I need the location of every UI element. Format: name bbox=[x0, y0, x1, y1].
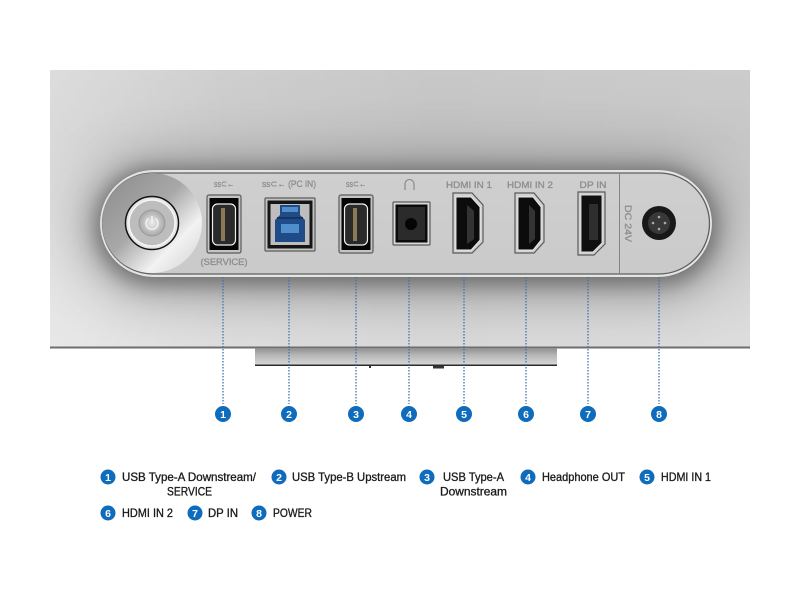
port: DisplayPort bbox=[578, 192, 605, 255]
legend: USB Type-B Upstream bbox=[292, 470, 406, 484]
legend bbox=[100, 470, 711, 520]
port: USB-B bbox=[265, 198, 315, 251]
legend: HDMI IN 2 bbox=[122, 506, 173, 520]
port: HDMI 2 bbox=[515, 193, 544, 253]
numbered markers: 4 bbox=[406, 409, 412, 421]
port labels: ss⊂← bbox=[214, 179, 234, 190]
legend: 2 bbox=[276, 472, 282, 484]
numbered markers: 5 bbox=[461, 409, 467, 421]
port: USB-A bbox=[339, 195, 373, 253]
diagram bbox=[50, 170, 750, 520]
port: DC power bbox=[642, 206, 676, 240]
legend: POWER bbox=[273, 506, 312, 520]
legend: USB Type-A bbox=[443, 470, 504, 484]
divider bbox=[619, 174, 620, 273]
numbered markers: 6 bbox=[523, 409, 529, 421]
port labels: (SERVICE) bbox=[200, 257, 248, 268]
callout leaders bbox=[223, 277, 659, 404]
legend: HDMI IN 1 bbox=[661, 470, 711, 484]
numbered markers: 8 bbox=[656, 409, 662, 421]
legend: 5 bbox=[644, 472, 650, 484]
power button bbox=[102, 173, 202, 273]
port labels: ss⊂← bbox=[346, 179, 366, 190]
legend: DP IN bbox=[208, 506, 238, 520]
legend: USB Type-A Downstream/ bbox=[122, 470, 257, 484]
port: headphone jack bbox=[393, 202, 430, 245]
legend: 7 bbox=[192, 508, 198, 520]
port labels: DP IN bbox=[580, 180, 607, 191]
port: HDMI 1 bbox=[453, 193, 483, 253]
numbered markers: 2 bbox=[286, 409, 292, 421]
legend: 1 bbox=[105, 472, 111, 484]
numbered markers bbox=[215, 406, 667, 422]
legend: 4 bbox=[525, 472, 531, 484]
port labels: DC 24V bbox=[622, 205, 633, 243]
panel bottom edge bbox=[50, 346, 750, 348]
legend: 6 bbox=[105, 508, 111, 520]
panel: monitor back bbox=[50, 70, 750, 348]
legend: Downstream bbox=[440, 484, 507, 498]
port: USB-A service bbox=[207, 195, 241, 253]
port labels: HDMI IN 2 bbox=[507, 180, 553, 191]
port labels bbox=[200, 179, 633, 268]
numbered markers: 3 bbox=[353, 409, 359, 421]
legend: 3 bbox=[424, 472, 430, 484]
numbered markers: 1 bbox=[220, 409, 226, 421]
port labels: HDMI IN 1 bbox=[446, 180, 492, 191]
legend: 8 bbox=[256, 508, 262, 520]
numbered markers: 7 bbox=[585, 409, 591, 421]
legend: Headphone OUT bbox=[542, 470, 626, 484]
legend: SERVICE bbox=[167, 484, 212, 498]
panel: port strip bbox=[100, 170, 712, 277]
stand base bbox=[255, 348, 557, 368]
port labels: ss⊂← (PC IN) bbox=[262, 179, 316, 190]
